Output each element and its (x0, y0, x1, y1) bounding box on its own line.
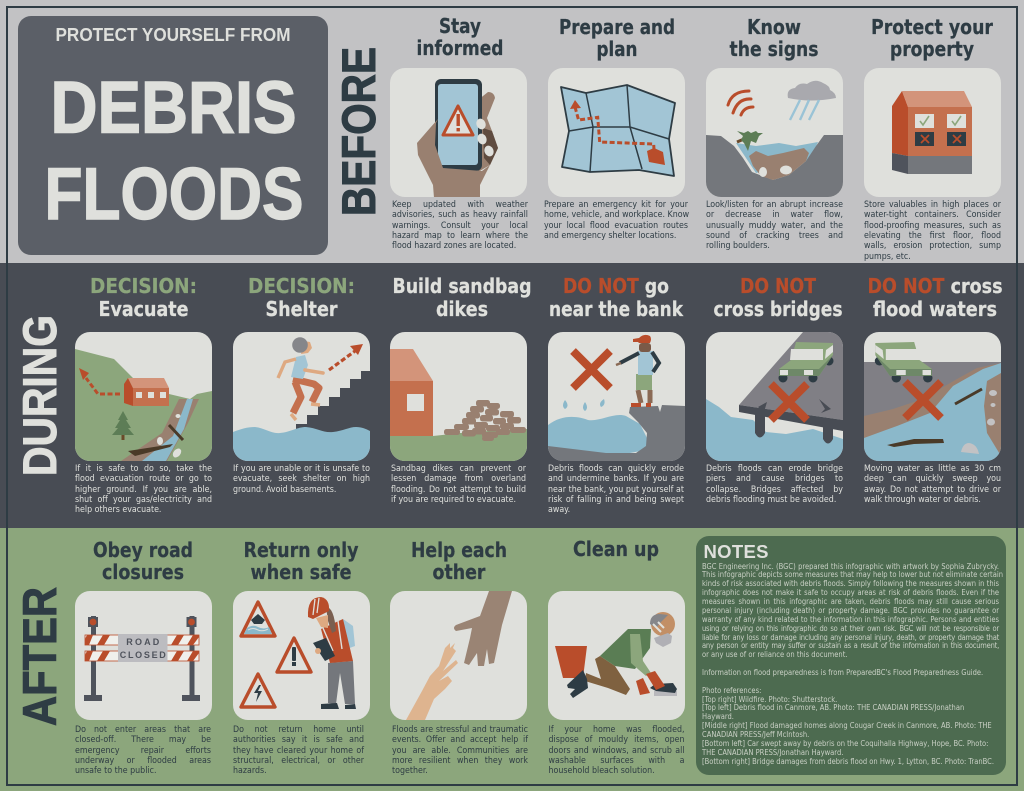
heading: Help each (411, 538, 507, 562)
step: prepare and plan (544, 15, 689, 241)
text: sound of cracking trees and (706, 231, 843, 241)
text: washable surfaces with a (548, 756, 684, 766)
text (548, 464, 684, 515)
text: Do not return home until (233, 725, 364, 735)
text: events. Offer and accept help if (392, 735, 528, 745)
text: closed-off. There may be (75, 735, 211, 745)
text (706, 464, 843, 505)
heading: the signs (730, 37, 818, 61)
text: near the bank, you put yourself at (548, 485, 684, 495)
heading: DO NOT cross (868, 274, 1002, 298)
text: Look/listen for an abrupt increase (706, 200, 843, 210)
text: Moving water as little as 30 cm (864, 464, 1001, 474)
section label: after: AFTER (13, 587, 66, 726)
heading (244, 538, 359, 584)
notes text: Hayward. (702, 712, 734, 721)
text: flood hazard zones are located. (392, 241, 516, 251)
icon: person pointing from eroding bank (548, 332, 685, 460)
icon: evacuation map (548, 68, 685, 196)
notes text: using or relying on this infographic do so at their own risk. BGC will not be responsible or (702, 624, 999, 633)
text (548, 725, 684, 777)
heading: Protect your (871, 15, 994, 39)
heading: flood waters (873, 297, 997, 321)
icon: evacuating from house on hillside (75, 332, 212, 460)
heading: Build sandbag (392, 274, 532, 298)
notes text: Photo references: (702, 686, 761, 695)
text: structural, electrical, or other (233, 756, 364, 766)
text: rolling boulders. (706, 241, 770, 251)
text: if you are required to evacuate. (391, 495, 516, 505)
title text: DEBRIS (50, 68, 296, 149)
text: authorities say it is safe and (233, 735, 364, 745)
text: pumps, etc. (864, 252, 911, 262)
text: help others evacuate. (75, 505, 161, 515)
text: doors and windows, and scrub all (548, 746, 684, 756)
icon: flood-proofed house (864, 68, 1001, 196)
heading (390, 540, 527, 586)
icon: two hands reaching (390, 591, 527, 720)
text: more resilient when they work (392, 756, 528, 766)
text (864, 464, 1001, 505)
notes text: liable for any loss or damage including any personal injury, death, or property damage that (702, 632, 999, 642)
icon: car in flood water (864, 332, 1001, 460)
text: hazard map to learn where the (392, 231, 528, 241)
text: higher ground. If you are able, (75, 485, 212, 495)
step: decision evacuate (75, 274, 212, 515)
icon: inspector and hazard signs (233, 591, 370, 720)
heading: when safe (250, 560, 352, 584)
text: household bleach solution. (548, 766, 655, 776)
heading: Know (747, 15, 801, 39)
notes text: THE CANADIAN PRESS/Jonathan Hayward. (702, 748, 843, 757)
text: Floods are stressful and traumatic (392, 725, 528, 735)
heading: DECISION: (248, 274, 355, 298)
text: evacuate, seek shelter on high (233, 474, 370, 484)
text: deep can quickly sweep you (864, 474, 1001, 484)
heading: Prepare and (559, 15, 675, 39)
notes text: [Bottom left] Car swept away by debris on the Coquihalla Highway, Hope, BC. Photo: (702, 739, 988, 748)
step: know the signs (706, 15, 843, 251)
text: and undermine banks. If you are (548, 474, 684, 484)
text: shut off your gas/electricity and (75, 495, 212, 505)
heading: Obey road (93, 538, 193, 562)
text: away. (548, 505, 570, 515)
panel: after band (0, 528, 1024, 791)
title text: PROTECT YOURSELF FROM (55, 24, 290, 45)
step: help each other (390, 540, 527, 785)
heading: dikes (436, 297, 488, 321)
text: flooding. Do not attempt to build (391, 485, 526, 495)
notes text: [Middle right] Flood damaged homes along Cougar Creek in Canmore, AB. Photo: THE (702, 721, 992, 730)
text: Keep updated with weather (392, 200, 528, 210)
text: walk through water or debris. (864, 495, 981, 505)
heading (871, 15, 994, 61)
text: emergency repair efforts (75, 746, 211, 756)
icon: house and sandbag dike (390, 332, 527, 460)
notes text: any person or entity may suffer or sustain as a result of the information in this document, (702, 641, 999, 650)
heading (248, 274, 355, 321)
notes text: CANADIAN PRESS/Jeff McIntosh. (702, 730, 809, 739)
text: Debris floods can erode bridge (706, 464, 843, 474)
heading (93, 538, 193, 584)
text: dispose of mouldy items, open (548, 735, 684, 745)
notes text: [Bottom right] Bridge damages from debris flood on Hwy. 1, Lytton, BC. Photo: TranBC. (702, 757, 994, 766)
text: home, vehicle, and workplace. Know (544, 210, 689, 220)
notes text (702, 562, 999, 767)
text: advisories, such as heavy rainfall (392, 210, 528, 220)
step: decision shelter (233, 274, 370, 495)
heading (868, 274, 1002, 321)
heading (559, 15, 675, 61)
heading: Evacuate (98, 297, 188, 321)
heading (90, 274, 197, 321)
notes text: infographic does not make it safe to occupy areas at risk of debris floods. Even if the (702, 588, 999, 597)
notes text: warranty of any kind related to the information in this infographic. Persons and entities (702, 615, 999, 624)
text (706, 200, 843, 251)
step: stay informed (390, 14, 528, 251)
step: do not go near the bank (548, 274, 685, 515)
notes text: This infographic depicts some measures that may help to lower but not eliminate certain (702, 570, 1003, 579)
heading: plan (596, 37, 638, 61)
icon: road closed barrier: CLOSED (120, 650, 166, 660)
text: they have cleared your home of (233, 746, 364, 756)
heading: cross bridges (714, 297, 842, 321)
text (391, 464, 526, 505)
text: water-tight containers. Consider (864, 210, 1001, 220)
icon: warning signs of a debris flood (706, 68, 843, 196)
section label: during: DURING (13, 315, 66, 476)
heading: near the bank (549, 297, 684, 321)
text: risk of falling in and being swept (548, 495, 684, 505)
step: do not cross bridges (706, 274, 843, 505)
text: your local flood evacuation routes (544, 221, 688, 231)
text: Debris floods can quickly erode (548, 464, 684, 474)
text: Prepare an emergency kit for your (544, 200, 688, 210)
notes text: kinds of risk associated with debris floods. Simply following the measures shown in this (702, 579, 999, 588)
notes text: Information on flood preparedness is from PreparedBC's Flood Preparedness Guide. (702, 668, 983, 677)
title text (44, 24, 303, 235)
text: together. (392, 766, 428, 776)
text: Store valuables in high places or (864, 200, 1001, 210)
step: clean up (548, 540, 685, 785)
text: ground. Avoid basements. (233, 485, 336, 495)
text: If your home was flooded, (548, 725, 684, 735)
heading (416, 14, 504, 60)
text (233, 464, 370, 495)
step: protect your property (864, 15, 1001, 262)
text: or decrease in water flow, (706, 210, 843, 220)
notes heading: NOTES (704, 541, 769, 562)
text: lessen damage from overland (391, 474, 526, 484)
text: warnings. Consult your local (392, 221, 528, 231)
icon: road closed barrier: ROAD (126, 637, 160, 647)
text (75, 464, 212, 515)
text: hazards. (233, 766, 267, 776)
step: build sandbag dikes (390, 274, 532, 505)
notes text: BGC Engineering Inc. (BGC) prepared this infographic with artwork by Sophia Zubrycky. (702, 562, 999, 570)
heading: DO NOT go (563, 274, 669, 298)
text: walls, erosion protection, sump (864, 241, 1001, 251)
heading: Clean up (573, 537, 659, 561)
step: do not cross flood waters (864, 274, 1002, 505)
text: Sandbag dikes can prevent or (391, 464, 526, 474)
text: elevating the first floor, flood (864, 231, 1001, 241)
text (544, 200, 689, 241)
text: flood evacuation route or go to (75, 474, 212, 484)
heading (549, 274, 684, 321)
heading: DECISION: (90, 274, 197, 298)
icon: person climbing stairs to high ground (233, 332, 370, 460)
text (864, 200, 1001, 262)
text: away. Do not attempt to drive or (864, 485, 1001, 495)
heading: property (890, 37, 974, 61)
notes text: or any use of or reliance on this document. (702, 650, 847, 659)
heading (730, 15, 818, 61)
text (75, 725, 211, 776)
step: obey road closures (75, 538, 212, 776)
heading: other (432, 560, 486, 584)
text: flood-proofing measures, such as (864, 221, 1001, 231)
text: and emergency shelter locations. (544, 231, 676, 241)
heading: Return only (244, 538, 359, 562)
text (392, 200, 528, 251)
title block (18, 16, 328, 255)
panel: notes (696, 536, 1006, 775)
section label: before: BEFORE (332, 47, 385, 216)
text: underway or flooded areas (75, 756, 211, 766)
text: If it is safe to do so, take the (75, 464, 212, 474)
heading: informed (416, 36, 504, 60)
panel: during band (0, 263, 1024, 528)
notes text: measures shown in this infographic are taken, debris floods may still cause serious (702, 597, 999, 606)
text: unusually muddy water, and the (706, 221, 843, 231)
text: you are able. Communities are (392, 746, 528, 756)
heading: closures (102, 560, 184, 584)
heading: DO NOT (740, 274, 816, 298)
text (392, 725, 528, 777)
notes text: [Top right] Wildfire. Photo: Shutterstock. (702, 695, 837, 704)
icon: person scrubbing floor (548, 591, 685, 720)
text: piers and cause bridges to (706, 474, 843, 484)
icon: damaged bridge with car (706, 332, 843, 460)
heading (392, 274, 532, 321)
text: collapse. Bridges affected by (706, 485, 843, 495)
panel: before band (0, 0, 1024, 263)
notes text: [Top left] Debris flood in Canmore, AB. Photo: THE CANADIAN PRESS/Jonathan (702, 703, 964, 712)
text (233, 725, 364, 776)
heading (714, 274, 842, 321)
text: Do not enter areas that are (75, 725, 211, 735)
heading: Stay (439, 14, 481, 38)
notes text: personal injury (including death) or property damage. BGC provides no guarantee or (702, 606, 999, 615)
text: If you are unable or it is unsafe to (233, 464, 370, 474)
text: debris flooding must be avoided. (706, 495, 836, 505)
step: return only when safe (233, 538, 370, 776)
icon: road closed barrier (75, 591, 212, 720)
icon: hand holding phone (390, 68, 527, 196)
text: unsafe to the public. (75, 766, 156, 776)
heading: Shelter (266, 297, 338, 321)
